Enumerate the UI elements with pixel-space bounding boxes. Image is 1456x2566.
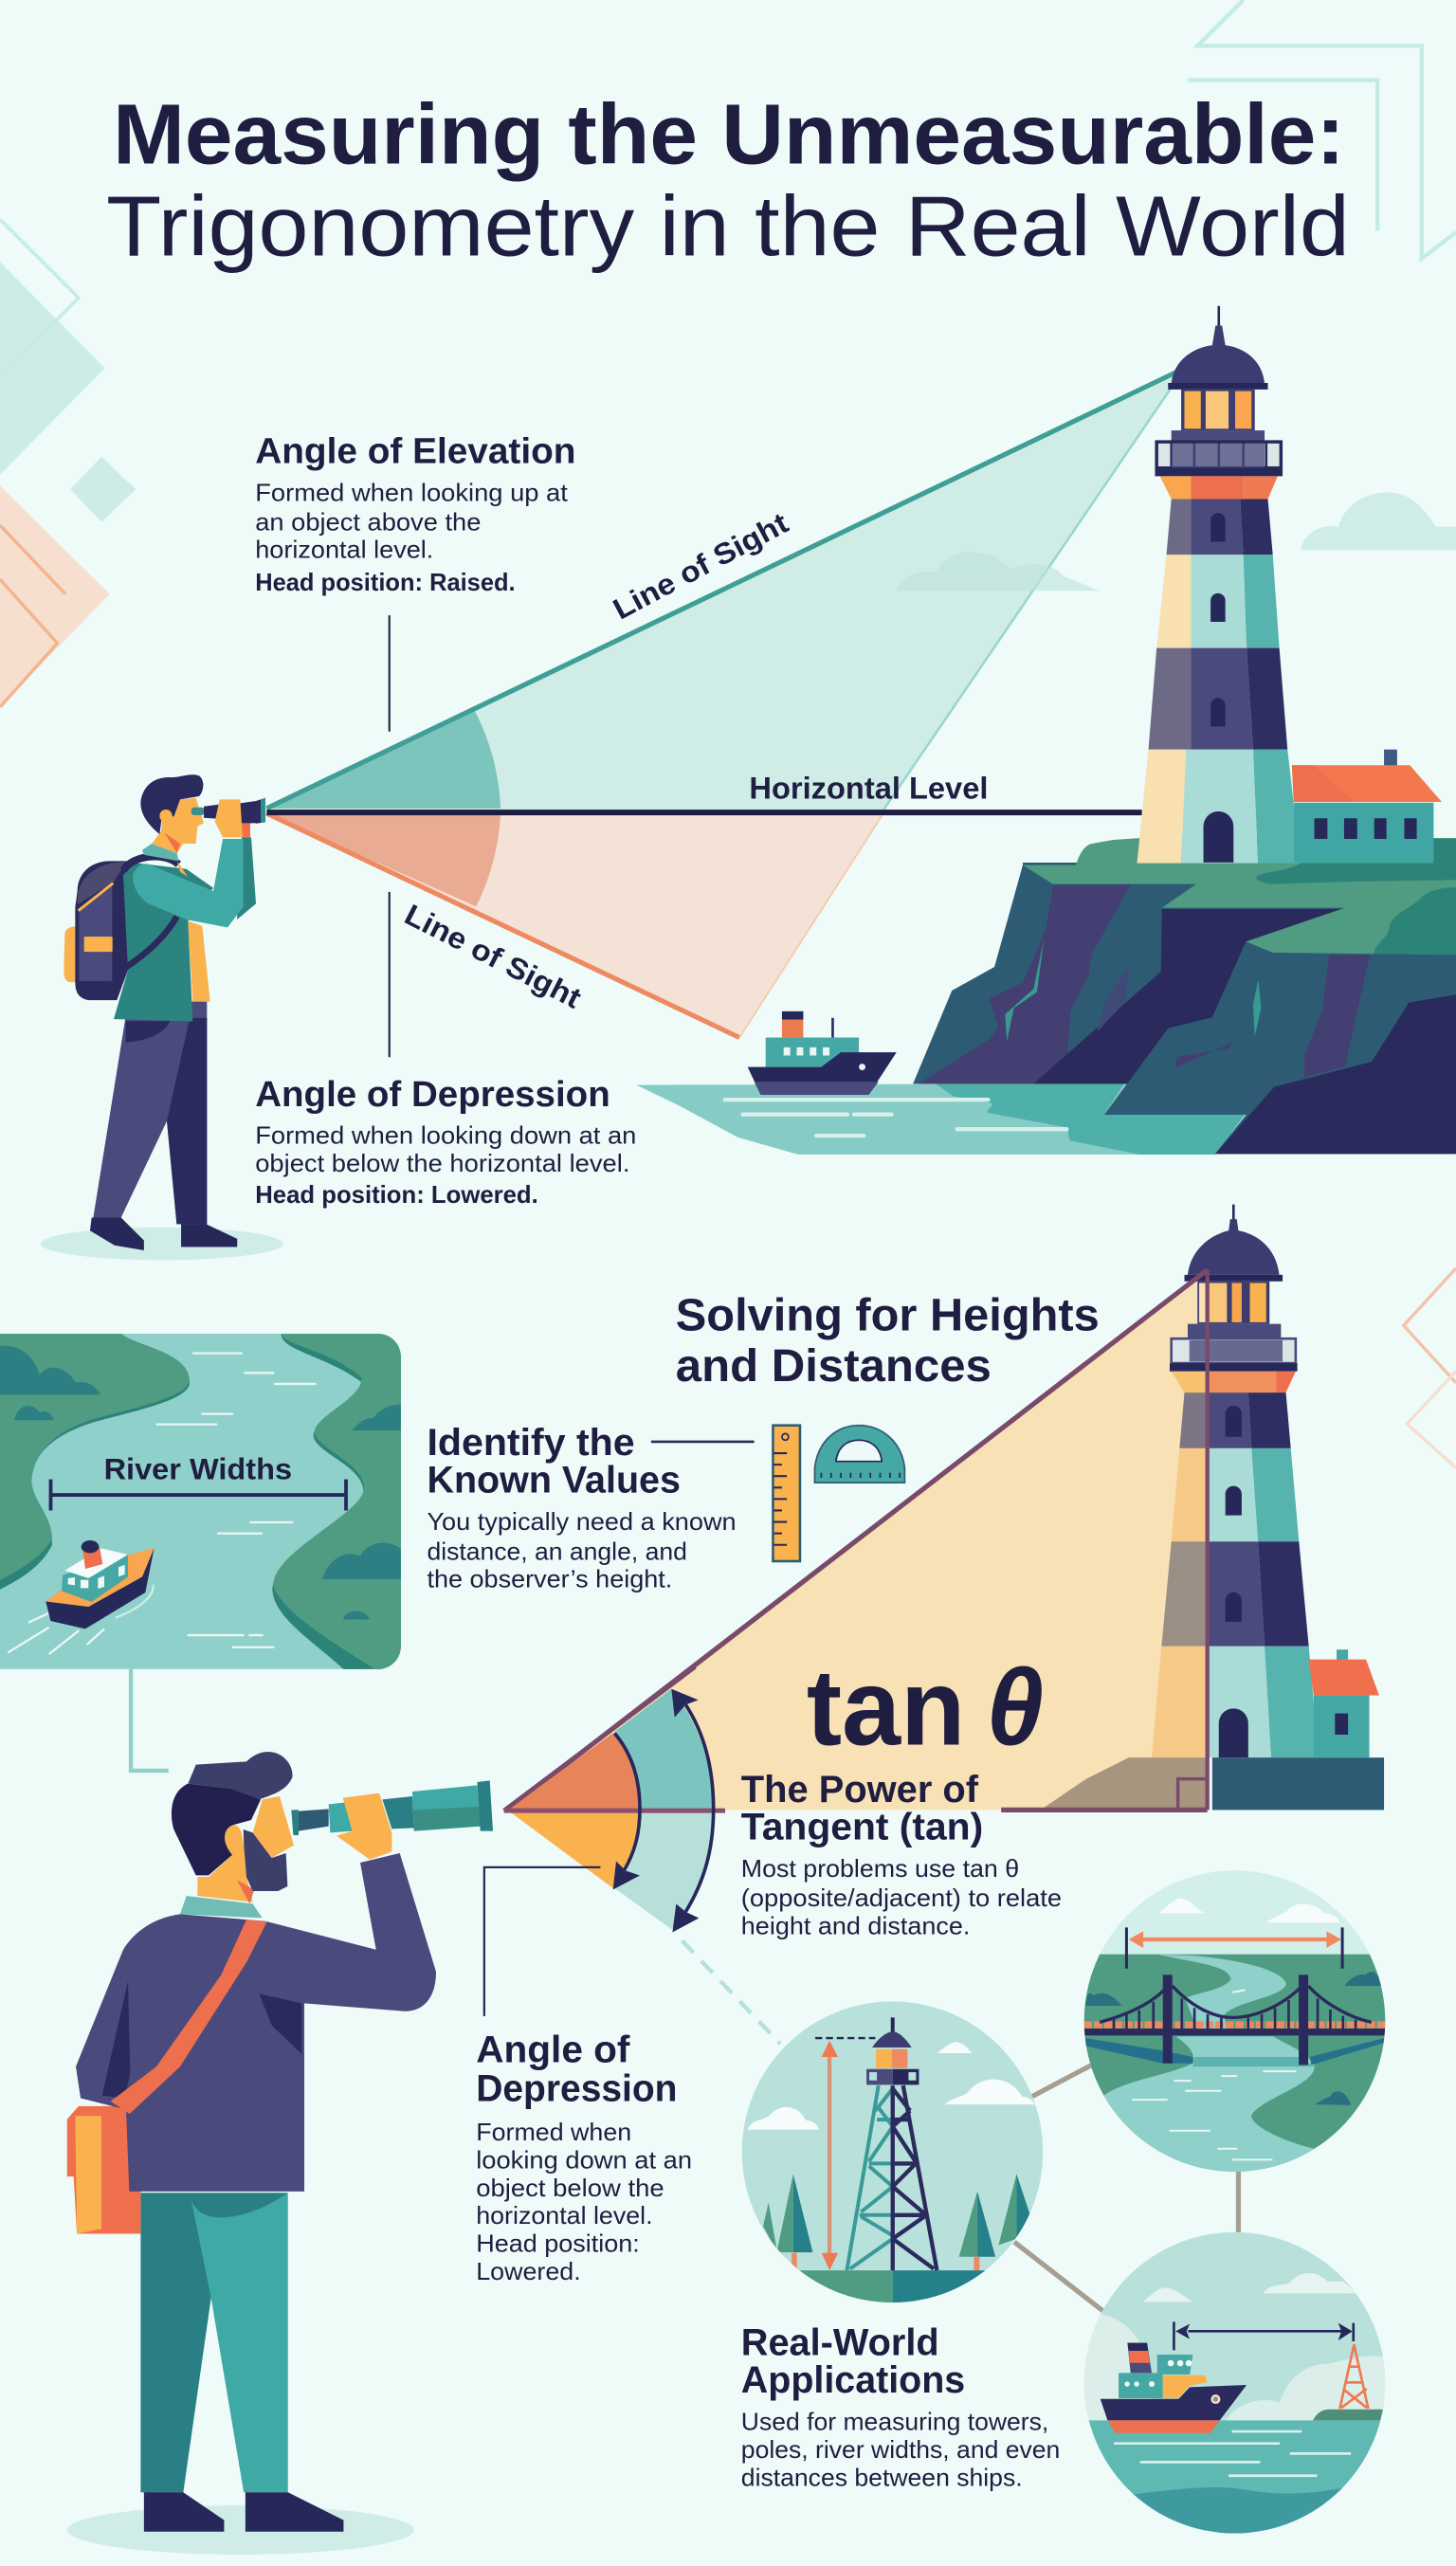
connector: river panel to observer	[131, 1669, 169, 1771]
text block: power of tangent: Most problems use tan θ	[741, 1856, 1019, 1883]
text block: power of tangent: (opposite/adjacent) to relate	[741, 1885, 1062, 1912]
label: line of sight upper: Line of Sight	[608, 506, 793, 626]
cottage two	[1309, 1649, 1379, 1757]
text block: angle of elevation: Formed when looking up at	[255, 480, 568, 506]
text block: real-world applications: Applications	[741, 2359, 965, 2401]
text block: identify known values: distance, an angle, and	[427, 1538, 687, 1565]
formula: tan theta	[807, 1647, 1044, 1768]
ship	[748, 1011, 897, 1095]
leader lines	[389, 615, 391, 1057]
person with binoculars	[41, 774, 283, 1260]
text block: real-world applications	[741, 2321, 1060, 2491]
text block: angle of depression: object below the horizontal level.	[255, 1151, 629, 1177]
text block: angle of depression second	[476, 2029, 692, 2285]
text block: angle of elevation	[255, 432, 575, 596]
text block: identify known values: You typically need a known	[427, 1509, 737, 1536]
lighthouse	[1137, 306, 1301, 864]
label: horizontal level: Horizontal Level	[749, 770, 988, 805]
cottage	[1292, 750, 1442, 863]
lighthouse two	[1041, 1205, 1384, 1810]
text block: power of tangent: height and distance.	[741, 1914, 970, 1940]
clouds	[897, 492, 1456, 591]
text block: real-world applications: poles, river widths, and even	[741, 2437, 1060, 2464]
text block: angle of depression second: object below the	[476, 2175, 664, 2202]
text block: real-world applications: distances between ships.	[741, 2465, 1023, 2491]
sight-line diagram: elevation and depression	[266, 370, 1181, 1057]
width measure	[51, 1480, 346, 1510]
text block: angle of depression second: horizontal level.	[476, 2203, 653, 2229]
text block: angle of elevation: an object above the	[255, 509, 481, 536]
text block: angle of depression second: looking down at an	[476, 2147, 692, 2174]
text block: angle of elevation: Head position: Raised.	[255, 570, 516, 596]
dashed connector	[682, 1941, 780, 2044]
sea	[636, 1083, 1245, 1155]
depression wedge	[266, 813, 883, 1038]
leader: angle of depression	[484, 1867, 600, 2016]
river boat	[46, 1540, 155, 1629]
text block: angle of elevation: Angle of Elevation	[255, 432, 575, 472]
text block: real-world applications: Used for measuring towers,	[741, 2410, 1048, 2436]
text block: identify known values: Known Values	[427, 1459, 681, 1501]
title: Measuring the Unmeasurable:	[113, 88, 1345, 183]
text block: angle of depression second: Depression	[476, 2068, 677, 2110]
circle: tower	[741, 2001, 1043, 2302]
text block: power of tangent: Tangent (tan)	[741, 1806, 983, 1847]
text block: angle of depression second: Lowered.	[476, 2259, 581, 2285]
connector lines between circles	[1014, 2066, 1238, 2311]
label: line of sight lower: Line of Sight	[399, 898, 587, 1015]
title: Trigonometry in the Real World	[106, 179, 1350, 274]
label: river widths: River Widths	[104, 1453, 292, 1486]
text block: angle of elevation: horizontal level.	[255, 537, 433, 564]
person with telescope	[67, 1752, 493, 2555]
cliff	[913, 838, 1456, 1154]
text block: identify known values	[427, 1422, 737, 1593]
icon: protractor	[814, 1426, 904, 1483]
circle: bridge	[1084, 1870, 1386, 2172]
icon: ruler	[773, 1426, 800, 1561]
elevation wedge	[266, 370, 1181, 810]
text block: angle of depression second: Head position:	[476, 2231, 640, 2258]
panel: river widths	[0, 1334, 408, 1670]
text block: angle of depression second: Formed when	[476, 2120, 631, 2146]
circle: ship distance	[1084, 2231, 1386, 2533]
angle sectors and arrows	[504, 1666, 725, 1933]
text block: angle of depression second: Angle of	[476, 2029, 630, 2070]
text block: angle of depression: Angle of Depression	[255, 1075, 610, 1115]
text block: identify known values: the observer’s height.	[427, 1567, 672, 1593]
tangent triangle	[507, 1270, 1208, 1810]
text block: angle of depression	[255, 1075, 636, 1209]
heading: solving for heights and distances: Solving for Heights	[676, 1290, 1100, 1341]
formula: tan theta: tan	[807, 1647, 965, 1768]
text block: power of tangent	[741, 1769, 1062, 1940]
text block: angle of depression: Formed when looking down at an	[255, 1123, 636, 1150]
horizontal level line	[266, 810, 1142, 814]
background decoration: left diamonds	[0, 219, 136, 707]
leader: known values to tools	[651, 1441, 755, 1443]
heading: solving for heights and distances	[676, 1290, 1100, 1392]
text block: identify known values: Identify the	[427, 1422, 635, 1464]
heading: solving for heights and distances: and Distances	[676, 1340, 992, 1392]
text block: angle of depression: Head position: Lowered.	[255, 1182, 538, 1209]
text block: real-world applications: Real-World	[741, 2321, 939, 2363]
background decoration: top right chevrons	[1188, 0, 1456, 259]
background decoration: right chevrons	[1404, 1268, 1456, 1468]
title	[106, 88, 1350, 274]
text block: power of tangent: The Power of	[741, 1769, 979, 1811]
triangle outline	[507, 1270, 1208, 1810]
formula: tan theta: θ	[987, 1647, 1044, 1768]
